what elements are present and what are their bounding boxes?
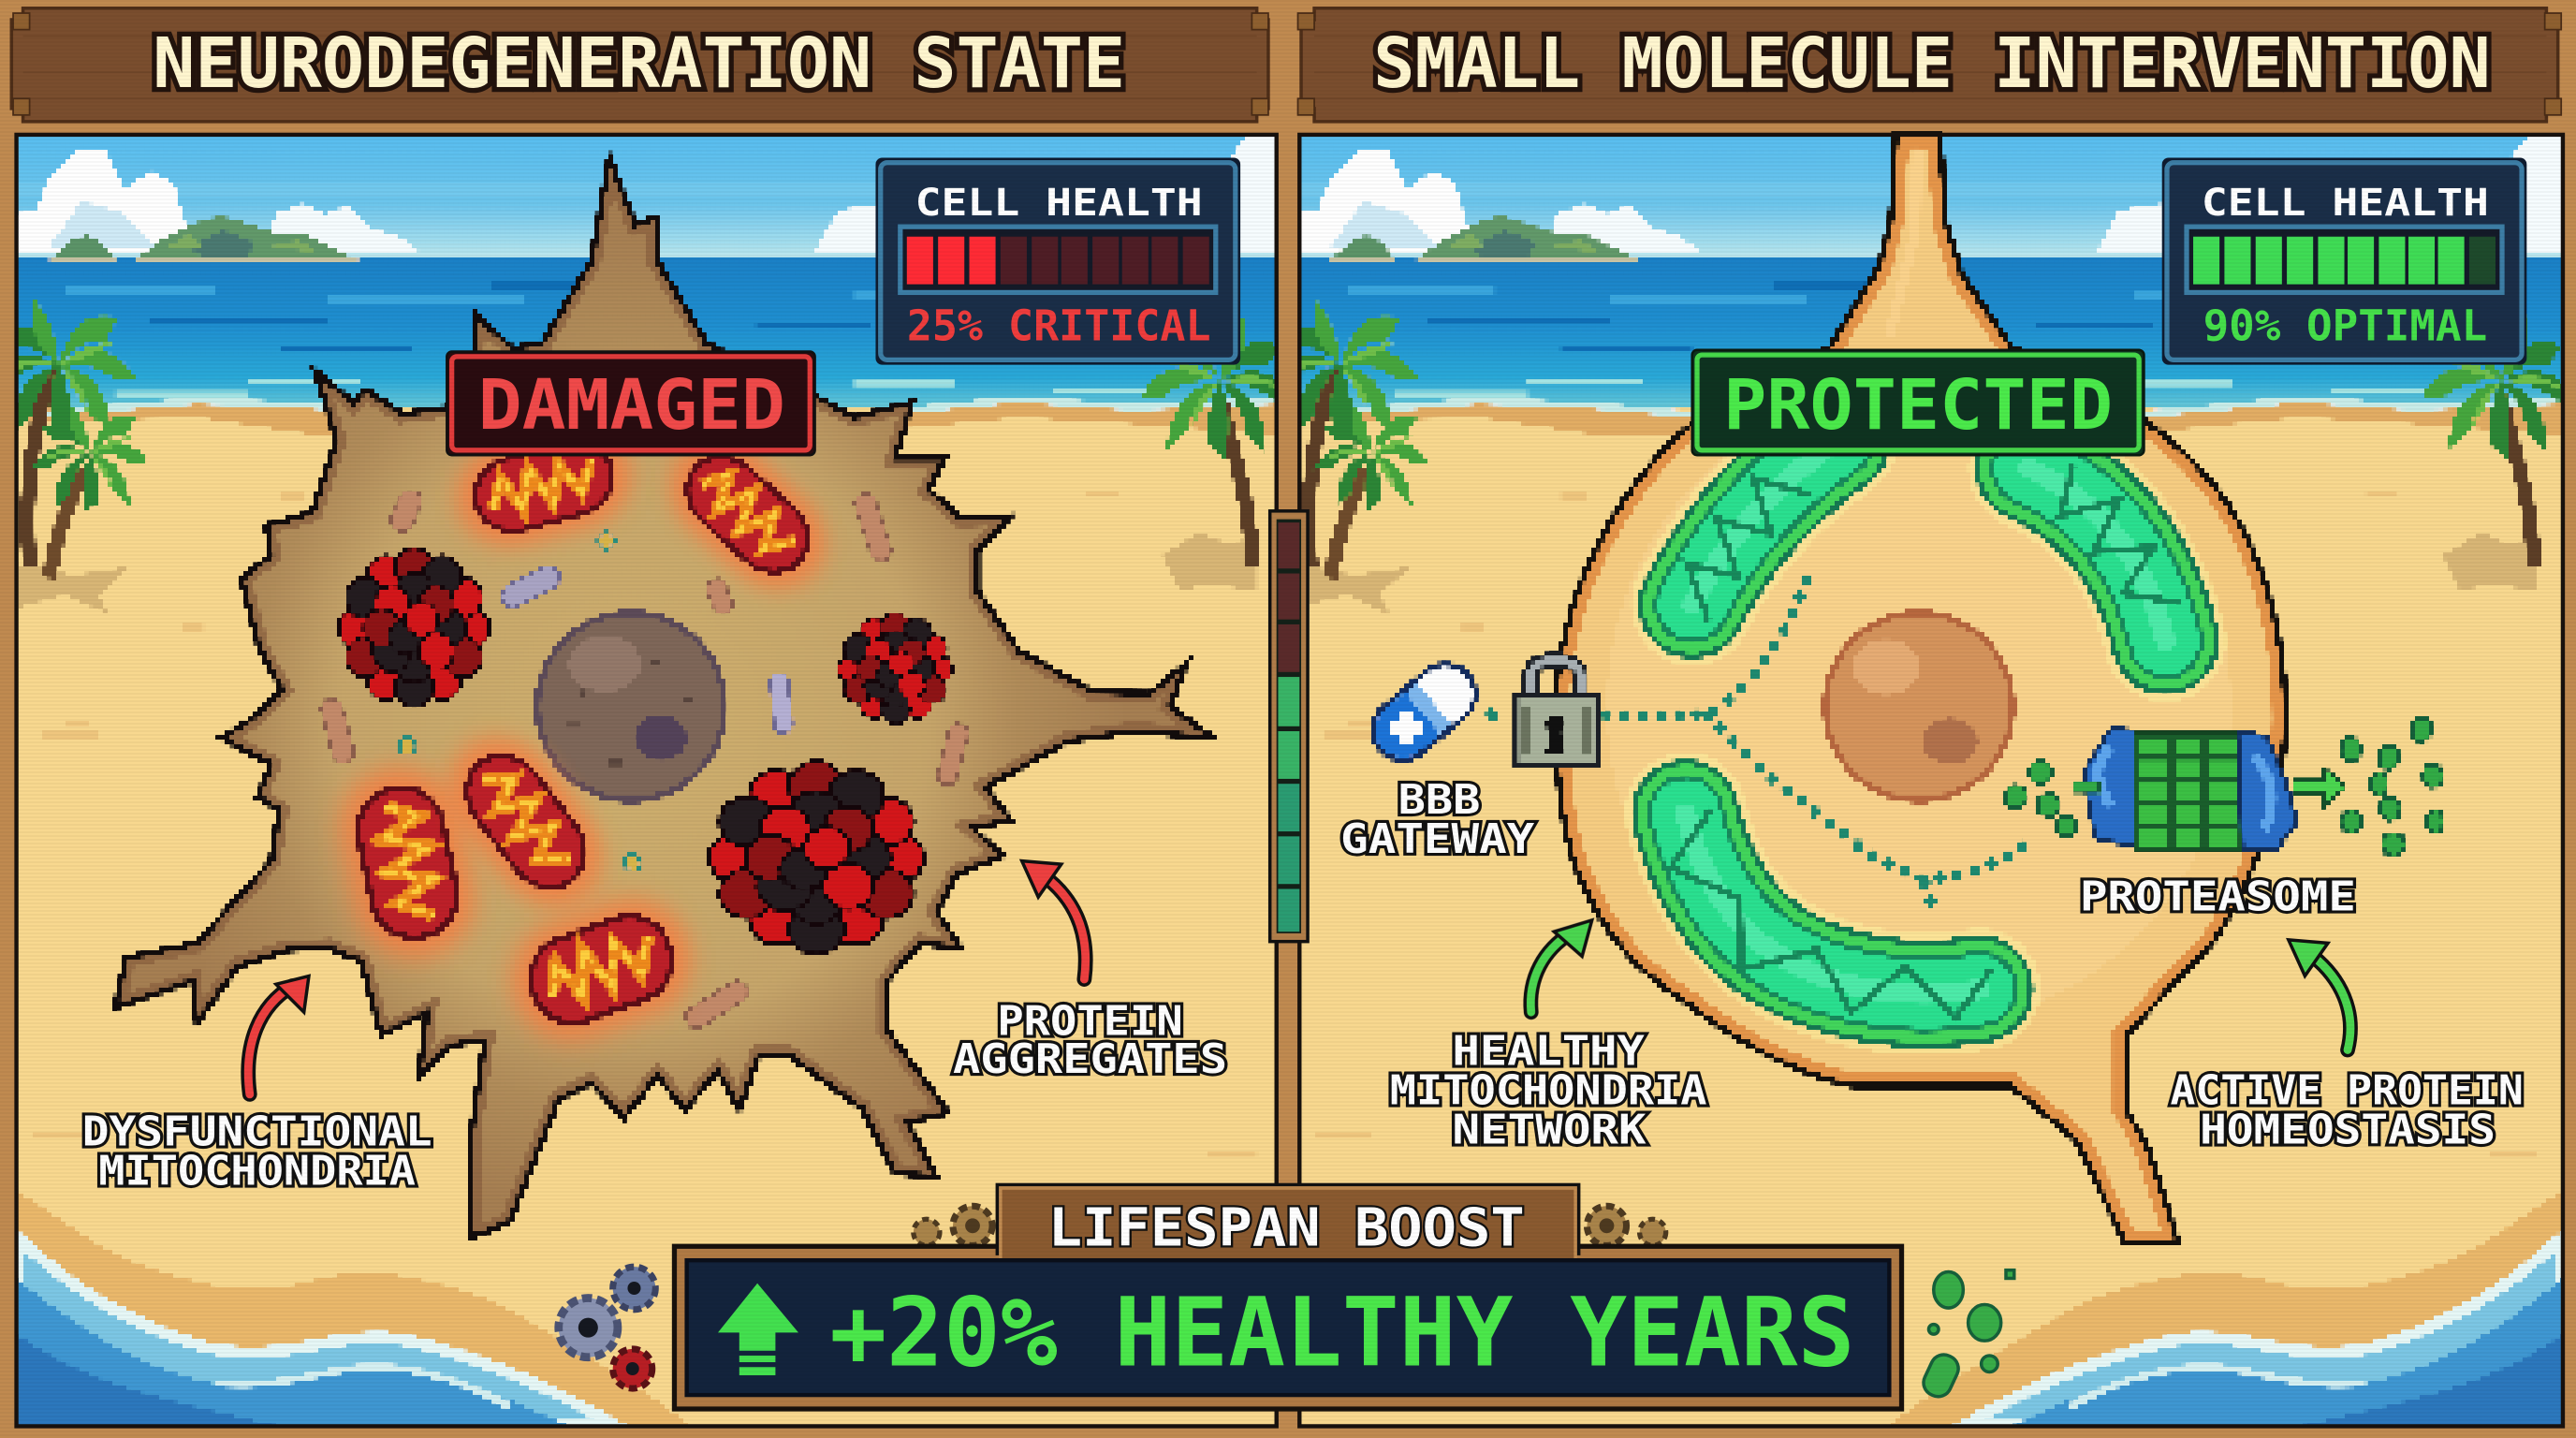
label: proteasome: PROTEASOME — [2080, 873, 2356, 920]
label: active protein homeostasis: ACTIVE PROTEIN — [2170, 1066, 2524, 1114]
label: bbb gateway — [1340, 776, 1535, 863]
label: dysfunctional mitochondria: MITOCHONDRIA — [98, 1147, 416, 1195]
badge: damaged — [446, 352, 815, 455]
peptide fragments — [2004, 718, 2443, 856]
label: dysfunctional mitochondria — [82, 1108, 432, 1195]
beach scene background left — [0, 135, 1314, 1426]
label: bbb gateway: BBB — [1398, 776, 1480, 824]
arrow to dysfunctional mitochondria — [248, 976, 309, 1094]
nucleus — [537, 613, 724, 800]
arrow to active proteasome — [2289, 940, 2350, 1050]
icon: padlock — [1516, 661, 1597, 766]
proteasome — [2083, 728, 2297, 851]
badge: protected: PROTECTED — [1723, 366, 2113, 446]
label: healthy mitochondria network: NETWORK — [1453, 1107, 1647, 1154]
label: active protein homeostasis: HOMEOSTASIS — [2200, 1107, 2496, 1154]
cell health meter: right: CELL HEALTH — [2202, 181, 2489, 225]
healthy neuron cell — [1361, 135, 2443, 1244]
label: healthy mitochondria network: MITOCHONDRIA — [1390, 1066, 1707, 1114]
healthy mitochondria — [1671, 440, 2180, 1019]
protein aggregates — [339, 548, 952, 954]
label: healthy mitochondria network — [1390, 1027, 1707, 1154]
badge: damaged: DAMAGED — [478, 366, 785, 446]
arrow out of proteasome — [2293, 768, 2346, 807]
beach scene background right — [1263, 135, 2576, 1426]
cell health meter: right: 90% OPTIMAL — [2203, 301, 2487, 350]
icon: pill — [1361, 653, 1487, 771]
heading: neurodegeneration state: NEURODEGENERATION STATE — [153, 24, 1125, 104]
icon: up arrow — [718, 1284, 798, 1375]
badge: protected — [1692, 350, 2144, 455]
label: protein aggregates: PROTEIN — [997, 998, 1183, 1046]
decorative gears at banner tab — [914, 1206, 1666, 1245]
center gauge — [1268, 509, 1310, 943]
arrow to protein aggregates — [1022, 861, 1086, 979]
lifespan boost banner: +20% HEALTHY YEARS — [829, 1278, 1855, 1388]
molecules: right of banner — [1919, 1270, 2014, 1401]
cell health meter: left — [875, 157, 1240, 365]
arrow to healthy mitochondria — [1530, 920, 1592, 1012]
heading: small molecule intervention — [1298, 8, 2561, 122]
label: dysfunctional mitochondria: DYSFUNCTIONAL — [82, 1108, 432, 1155]
panel: neurodegeneration state — [0, 135, 1314, 1426]
damaged neuron cell — [115, 157, 1212, 1238]
heading: small molecule intervention: SMALL MOLECULE INTERVENTION — [1373, 24, 2491, 104]
dysfunctional mitochondria — [329, 415, 845, 1056]
heading: neurodegeneration state — [11, 8, 1268, 122]
label: bbb gateway: GATEWAY — [1340, 815, 1535, 863]
molecule dotted path — [1492, 575, 2029, 914]
panel: small molecule intervention — [1263, 135, 2576, 1426]
nucleus — [1825, 613, 2012, 800]
label: active protein homeostasis — [2170, 1066, 2524, 1154]
cell health meter: right — [2162, 157, 2526, 365]
lifespan boost banner — [672, 1183, 1904, 1412]
cell health meter: left: 25% CRITICAL — [907, 301, 1211, 350]
gears: left of banner — [559, 1267, 655, 1388]
cell health meter: left: CELL HEALTH — [915, 181, 1203, 225]
label: healthy mitochondria network: HEALTHY — [1453, 1027, 1646, 1075]
label: protein aggregates: AGGREGATES — [953, 1035, 1227, 1083]
label: protein aggregates — [953, 998, 1227, 1083]
lifespan boost banner: LIFESPAN BOOST — [1048, 1197, 1525, 1258]
